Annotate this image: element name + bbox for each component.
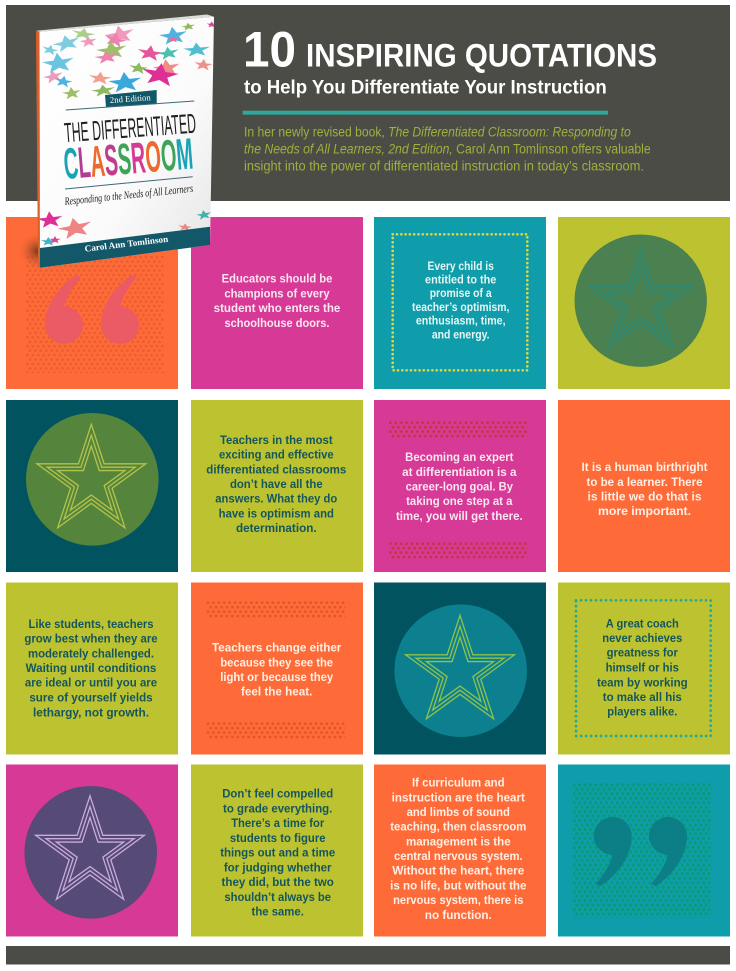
- icon: star: [588, 248, 693, 348]
- book cover: THE DIFFERENTIATED: [63, 108, 197, 148]
- quote text: shouldn’t always be: [224, 890, 331, 904]
- quote text: entitled to the: [425, 273, 497, 287]
- panel: star on dark teal, row three: [374, 582, 546, 754]
- icon: opening quotation marks: [45, 275, 139, 344]
- quote text: teacher’s optimism,: [412, 300, 509, 314]
- quote text: answers. What they do: [215, 492, 337, 506]
- quote text: team by working: [597, 675, 688, 689]
- panel: educators quote: [191, 217, 363, 389]
- quote text: feel the heat.: [241, 684, 312, 698]
- title: [243, 22, 657, 98]
- quote text: Teachers change either: [212, 640, 342, 654]
- title: INSPIRING QUOTATIONS: [306, 38, 657, 74]
- quote text: for judging whether: [224, 860, 332, 874]
- author band: [40, 227, 210, 268]
- quote text: enthusiasm, time,: [416, 313, 506, 327]
- header panel: [6, 5, 730, 201]
- dotted frame: [576, 600, 711, 736]
- quote text: Don’t feel compelled: [222, 787, 333, 801]
- quote text: [390, 776, 527, 922]
- quote text: [396, 450, 523, 523]
- panel: every child quote: [374, 217, 546, 389]
- book pages top edge: [36, 14, 214, 32]
- quote text: instruction are the heart: [392, 790, 525, 804]
- edition badge: 2nd Edition: [109, 92, 152, 105]
- quote text: never achieves: [602, 631, 682, 645]
- quote text: are ideal or until you are: [25, 676, 157, 690]
- icon: star: [37, 424, 146, 528]
- quote text: don’t have all the: [230, 477, 323, 491]
- panel: closing quote mark: [558, 764, 730, 936]
- panel: great coach quote: [558, 582, 730, 754]
- quote text: career-long goal. By: [406, 479, 513, 493]
- dot band: top: [207, 600, 345, 618]
- quote text: students to figure: [230, 831, 326, 845]
- quote text: [597, 616, 688, 719]
- quote text: Without the heart, there: [392, 864, 525, 878]
- quote text: things out and a time: [220, 846, 335, 860]
- book cover: [36, 14, 217, 268]
- quote text: teaching, then classroom: [390, 820, 526, 834]
- cover stars: [36, 21, 217, 245]
- edition badge: [105, 90, 157, 107]
- quote text: [582, 460, 708, 518]
- icon: circle: [24, 786, 157, 919]
- panel: curriculum quote: [374, 764, 546, 936]
- panel: star on lime: [558, 217, 730, 389]
- panel: teachers change quote: [191, 582, 363, 754]
- quote text: lethargy, not growth.: [33, 705, 149, 719]
- dot band: top: [389, 420, 527, 438]
- quote text: Like students, teachers: [28, 617, 154, 631]
- quote text: [212, 640, 342, 698]
- title: to Help You Differentiate Your Instruction: [244, 77, 607, 98]
- quote text: Waiting until conditions: [26, 661, 157, 675]
- quote text: time, you will get there.: [396, 509, 523, 523]
- dot band: bottom: [207, 722, 345, 738]
- quote text: is no life, but without the: [390, 878, 527, 892]
- quote text: central nervous system.: [394, 849, 523, 863]
- quote text: [412, 259, 509, 342]
- quote text: to make all his: [603, 690, 682, 704]
- icon: star: [36, 796, 144, 899]
- quote text: [206, 433, 347, 535]
- quote text: taking one step at a: [406, 494, 513, 508]
- quote text: and energy.: [432, 328, 490, 342]
- quote text: have is optimism and: [219, 506, 334, 520]
- icon: circle: [574, 235, 707, 367]
- quote text: [214, 272, 341, 330]
- quote text: players alike.: [607, 705, 677, 719]
- quote text: because they see the: [220, 655, 333, 669]
- panel: teachers optimism quote: [191, 400, 363, 572]
- quote text: to be a learner. There: [586, 475, 703, 489]
- quote text: more important.: [598, 504, 691, 518]
- book spine: [36, 31, 40, 268]
- quote text: at differentiation is a: [402, 465, 517, 479]
- quote text: they did, but the two: [222, 875, 334, 889]
- quote text: nervous system, there is: [393, 893, 524, 907]
- quote text: himself or his: [606, 660, 679, 674]
- quote text: Educators should be: [222, 272, 333, 286]
- quote text: light or because they: [220, 670, 333, 684]
- icon: closing quotation marks: [594, 817, 687, 886]
- quote text: champions of every: [224, 286, 330, 300]
- panel: like students quote: [6, 582, 178, 754]
- panel: becoming an expert quote: [374, 400, 546, 572]
- teal rule: [243, 111, 608, 115]
- intro paragraph: In her newly revised book, The Differentiated Classroom: Responding to: [244, 125, 631, 140]
- quote text: Every child is: [428, 259, 494, 273]
- quote text: [220, 787, 335, 919]
- quote text: Becoming an expert: [405, 450, 513, 464]
- intro paragraph: insight into the power of differentiated instruction in today’s classroom.: [244, 159, 644, 174]
- panel: human birthright quote: [558, 400, 730, 572]
- quote text: A great coach: [606, 616, 679, 630]
- panel: star on dark teal: [6, 400, 178, 572]
- book shadow: [17, 231, 59, 271]
- cover subtitle: Responding to the Needs of All Learners: [63, 183, 194, 208]
- panel: opening quote mark: [6, 217, 178, 389]
- cover rule lower: [65, 177, 193, 189]
- cover classroom word: CLASSROOM: [62, 130, 195, 189]
- quote text: There’s a time for: [231, 816, 324, 830]
- quote text: sure of yourself yields: [29, 690, 153, 704]
- intro paragraph: [244, 125, 651, 174]
- icon: circle: [26, 413, 159, 546]
- quote text: greatness for: [607, 646, 678, 660]
- quote text: and limbs of sound: [407, 805, 510, 819]
- book front: [40, 17, 214, 268]
- panel: grading quote: [191, 764, 363, 936]
- quote text: If curriculum and: [412, 776, 505, 790]
- dot band: bottom: [389, 542, 527, 558]
- intro paragraph: the Needs of All Learners, 2nd Edition, Carol Ann Tomlinson offers valuable: [244, 142, 651, 157]
- quote text: It is a human birthright: [582, 460, 708, 474]
- quote text: promise of a: [430, 286, 492, 300]
- quote text: [24, 617, 158, 719]
- author name: Carol Ann Tomlinson: [84, 234, 169, 254]
- quote text: grow best when they are: [24, 632, 158, 646]
- quote text: determination.: [236, 521, 317, 535]
- footer bar: [6, 946, 730, 964]
- icon: circle: [394, 604, 527, 737]
- quote text: to grade everything.: [223, 801, 332, 815]
- cover rule upper: [66, 101, 194, 110]
- quote text: Teachers in the most: [220, 433, 333, 447]
- quote text: is little we do that is: [588, 490, 702, 504]
- quote text: exciting and effective: [219, 448, 334, 462]
- quote text: differentiated classrooms: [206, 462, 347, 476]
- quote text: the same.: [252, 905, 304, 919]
- title: 10: [243, 22, 296, 78]
- panel: star on pink: [6, 764, 178, 936]
- icon: star: [406, 615, 514, 719]
- dotted frame: [393, 234, 527, 370]
- quote text: schoolhouse doors.: [224, 316, 330, 330]
- quote text: student who enters the: [214, 301, 341, 315]
- quote text: management is the: [406, 834, 511, 848]
- quote text: no function.: [425, 908, 492, 922]
- quote text: moderately challenged.: [28, 646, 154, 660]
